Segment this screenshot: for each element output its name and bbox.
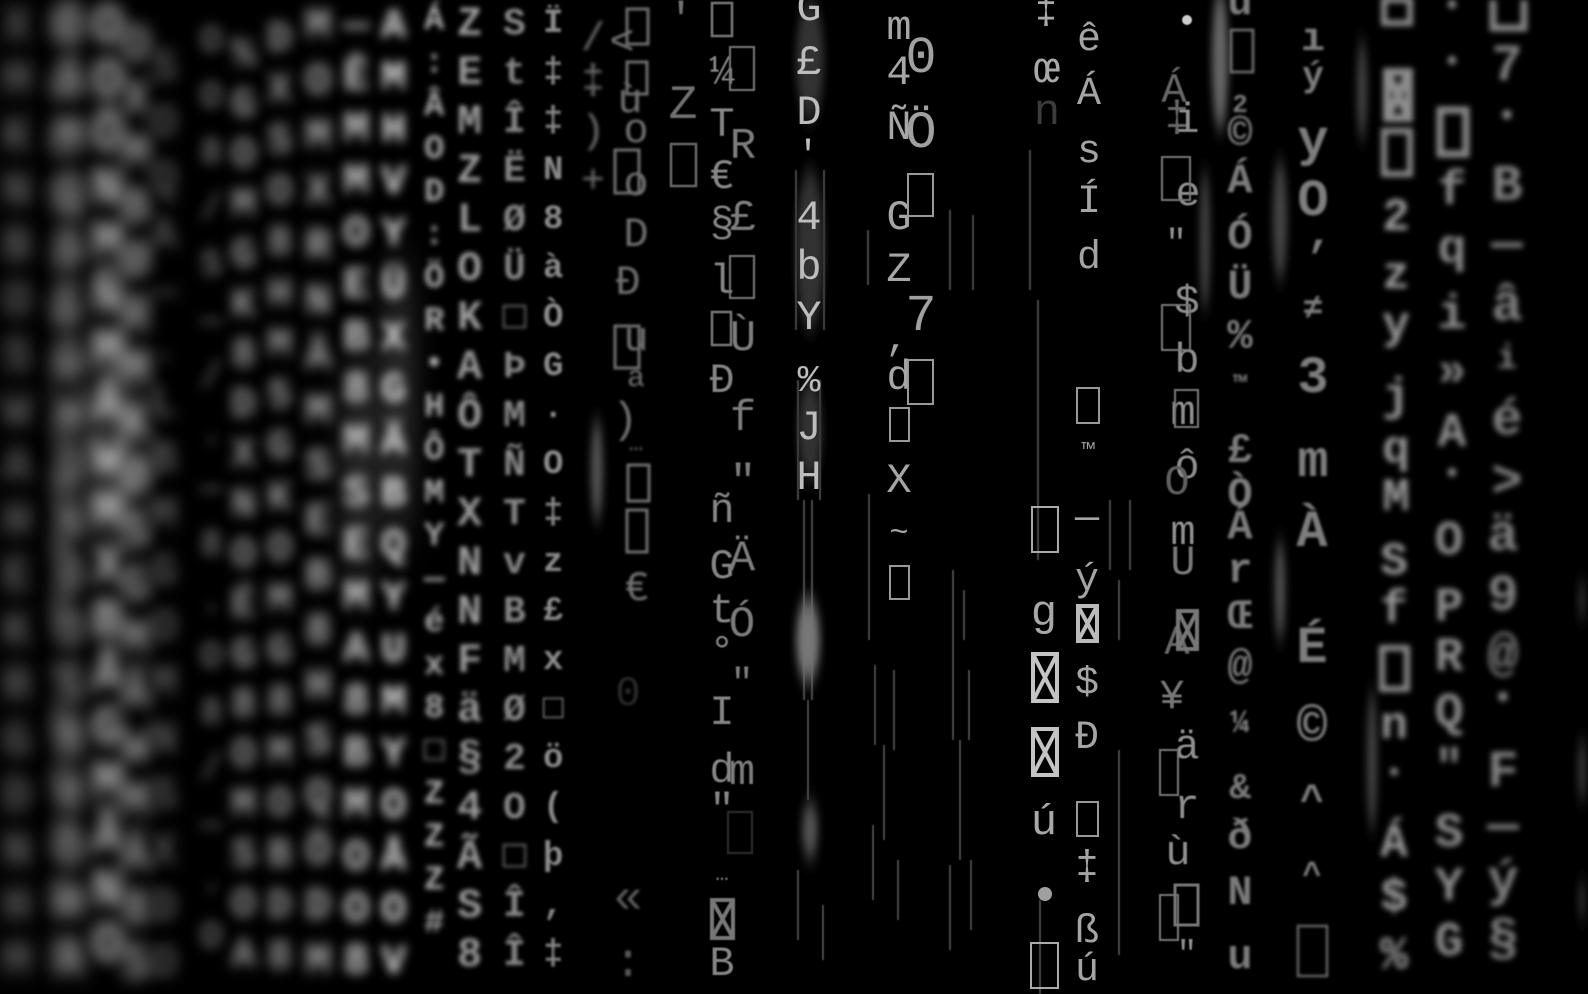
column: characters at 1313: ı (1301, 18, 1325, 63)
column: characters at 1505: ä (1487, 507, 1519, 566)
column: characters at 1240: Œ (1227, 593, 1253, 641)
column: characters at 1240: r (1227, 547, 1253, 595)
column: layered characters at 1183: ¥ (1159, 673, 1185, 721)
column: boxes and glyphs at 635: o (623, 107, 649, 155)
column: layered characters at 1183: m (1170, 509, 1196, 557)
column: characters at 1313: m (1297, 433, 1329, 492)
column: mixed glyphs at 742: m (729, 748, 755, 798)
column 14: ZEMZLOKAÔTXNNFä§4ÃS8 (457, 0, 482, 979)
column: characters at 1313: É (1296, 619, 1328, 678)
column: layered characters at 1183: r (1174, 783, 1200, 831)
column: mixed glyphs at 742: Ó (729, 598, 755, 650)
column: characters at 1313: ^ (1300, 780, 1324, 825)
column: characters at 1313: À (1296, 503, 1328, 562)
column: layered characters at 1183: i (1174, 97, 1200, 145)
column: characters at 1450 (1435, 0, 1467, 970)
column: characters at 1240: ð (1227, 813, 1253, 861)
column: bright characters at 809: ' (797, 135, 819, 178)
column: characters at 1240: N (1227, 869, 1253, 917)
column: layered characters at 1183: ù (1165, 829, 1191, 877)
column: characters at 1450: P (1435, 581, 1463, 635)
column: mixed glyphs at 722: ° (709, 629, 735, 677)
column: characters at 1505: — (1490, 215, 1523, 274)
column: mixed glyphs at 722: B (709, 940, 735, 988)
column: mixed glyphs at 722: t (709, 587, 735, 635)
column: layered characters at 1183: U (1170, 539, 1196, 587)
column: characters at 1505: i (1497, 341, 1517, 379)
column: characters at 1450: R (1435, 631, 1464, 685)
column: mixed glyphs at 722: € (709, 153, 735, 201)
column: characters at 920: Ö (905, 104, 937, 163)
column: characters at 899 (886, 4, 912, 599)
column: bright characters at 809: % (798, 360, 821, 403)
column: characters at 1088: Đ (1075, 716, 1099, 761)
column: far left sharp group: ) (581, 110, 605, 155)
column: characters at 1396: M (1382, 472, 1410, 524)
column: characters at 1505: — (1486, 797, 1519, 856)
column: mixed glyphs at 722: Đ (709, 357, 735, 405)
column: characters at 899: , (886, 319, 908, 362)
column: characters at 1505: F (1487, 743, 1519, 802)
column: characters at 899: m (886, 4, 912, 52)
column: characters at 1240: 2 (1232, 90, 1248, 120)
column: layered characters at 1183: Á (1161, 66, 1187, 115)
column: bright characters at 809 (796, 0, 822, 502)
column: characters at 1313 (1296, 18, 1333, 976)
blurred background code columns (0, 0, 566, 994)
column: characters at 1240: Ó (1227, 212, 1253, 261)
column: characters at 1396: $ (1380, 872, 1408, 924)
column 6: SOQA—.LBMGOMNSXDO (150, 42, 178, 990)
column: characters at 1396: . (1380, 737, 1408, 789)
column: characters at 920: 7 (905, 287, 937, 346)
column 15: StÎËØÜ□ÞMÑTvBMØ2O□ÎÎ (503, 3, 526, 977)
column: characters at 1450: G (1435, 916, 1463, 970)
column: characters at 1450: A (1438, 407, 1467, 461)
column: boxes and glyphs at 635: < (609, 19, 635, 67)
column: characters at 1396: f (1380, 584, 1408, 636)
column: layered characters at 1183: m (1170, 389, 1196, 437)
column: bright characters at 809: J (796, 404, 822, 452)
column 16: Ï‡‡N8àÒG·O‡z£x□ö(þ,‡ (543, 5, 563, 974)
column: characters at 1313: , (1307, 210, 1333, 260)
column: characters at 1450: q (1438, 223, 1466, 277)
column: characters at 1313: © (1296, 699, 1328, 758)
column: far left sharp group (581, 18, 605, 205)
column: characters at 1450: • (1443, 458, 1461, 492)
column: characters at 1450: • (1443, 46, 1461, 80)
column: Z group: Z (669, 79, 697, 133)
column: characters at 1240: ™ (1233, 373, 1248, 400)
column 2: BOOD8WM0RKE—NOSDM (50, 0, 80, 985)
column: layered characters at 1183: ‡ (1164, 95, 1190, 143)
column: boxes at 1044: g (1031, 589, 1057, 639)
column: characters at 1396: 2 (1382, 192, 1410, 244)
column: bright characters at 809: Y (796, 294, 822, 342)
column: characters at 1088: ê (1077, 18, 1101, 63)
column: boxes and glyphs at 635: € (624, 565, 650, 613)
column: mixed glyphs at 742: " (730, 458, 756, 508)
column: layered characters at 1183: ô (1174, 443, 1200, 491)
column: characters at 1505: é (1491, 391, 1523, 450)
column: characters at 899: d (886, 354, 912, 402)
column: characters at 899: Z (886, 246, 912, 294)
column: mixed glyphs at 742: Ù (730, 312, 756, 364)
column: characters at 1396: y (1382, 300, 1410, 352)
column: edge of frame (1578, 580, 1586, 920)
column: layered characters at 1183: O (1164, 459, 1190, 507)
column: boxes at 1044: œ (1034, 46, 1060, 96)
column: characters at 1088: $ (1075, 662, 1099, 707)
column: mixed glyphs at 722: l (709, 258, 735, 306)
column: mixed glyphs at 722: T (709, 101, 735, 149)
column: characters at 1450: " (1435, 743, 1463, 797)
column: boxes and glyphs at 635 (609, 9, 650, 991)
column: characters at 1088: d (1077, 236, 1101, 281)
column: mixed glyphs at 742: £ (730, 194, 756, 244)
column: far left sharp group: / (581, 18, 605, 63)
column: characters at 1450: f (1438, 165, 1466, 219)
column: characters at 1396: j (1382, 372, 1410, 424)
column: layered characters at 1183: " (1165, 224, 1187, 265)
column: characters at 1088: Í (1077, 178, 1101, 225)
column: mixed glyphs at 722: ñ (709, 487, 735, 535)
column: far left sharp group: ‡ (581, 60, 605, 105)
column: characters at 1088: ú (1075, 948, 1099, 993)
column: boxes and glyphs at 635: « (614, 873, 642, 927)
column 12: AMHVYÜXGÄBQYUMYOÅOV (381, 2, 406, 986)
column: characters at 1313: ý (1302, 56, 1324, 97)
column: mixed glyphs at 722: d (709, 747, 735, 795)
column: bright characters at 809: b (796, 244, 822, 292)
column: boxes and glyphs at 635: 0 (615, 670, 641, 718)
column: characters at 1240: @ (1227, 643, 1253, 691)
column: characters at 1505: B (1491, 157, 1523, 216)
column: characters at 1240: Ò (1227, 470, 1253, 519)
column: mixed glyphs at 722: § (709, 201, 735, 249)
column: characters at 1240: % (1227, 313, 1253, 361)
column: far left sharp group: + (581, 160, 605, 205)
column: characters at 1396: Á (1380, 817, 1408, 870)
column: layered characters at 1183: " (1177, 937, 1197, 975)
column: mixed glyphs at 722: I (709, 689, 735, 737)
column: bright characters at 809: 4 (796, 194, 822, 242)
column: characters at 1505: > (1491, 453, 1523, 512)
column: boxes at 1044: n (1034, 88, 1060, 138)
column: characters at 1450: i (1438, 289, 1466, 343)
column: boxes and glyphs at 635: Đ (615, 259, 641, 307)
column: characters at 1240: u (1227, 933, 1253, 981)
column: boxes and glyphs at 635: … (629, 431, 643, 458)
column 4: OOÖNMÑMÁWMXBÅGMÃNO (91, 0, 125, 977)
column: characters at 1505: § (1487, 912, 1519, 971)
column: characters at 1450: O (1435, 515, 1463, 569)
column: characters at 920: 0 (905, 29, 937, 88)
column: layered characters at 1183: A (1164, 619, 1190, 667)
column: characters at 1450: » (1438, 346, 1466, 400)
column: boxes and glyphs at 635: u (623, 315, 649, 363)
column: bright characters at 809: D (796, 89, 822, 137)
column: characters at 1240: ¼ (1230, 705, 1250, 742)
column 11: —ÊMMOEB8MSEMA8BMOO8 (343, 1, 369, 987)
column: characters at 1450: Q (1435, 687, 1463, 741)
column: layered characters at 1183: e (1175, 170, 1201, 218)
column: boxes and glyphs at 635: ù (617, 77, 643, 125)
column: characters at 1240: £ (1227, 427, 1253, 475)
column: characters at 1313: y (1297, 112, 1329, 171)
column: bright characters at 809: H (796, 454, 822, 502)
column: mixed glyphs at 722: G (709, 543, 735, 591)
column: characters at 1313: ^ (1302, 857, 1322, 894)
column: characters at 1088: Á (1077, 70, 1101, 117)
column: characters at 1240: © (1227, 111, 1253, 159)
column: characters at 1505: 7 (1491, 37, 1523, 96)
column: characters at 1088: ‡ (1075, 846, 1099, 891)
column: characters at 1505: • (1497, 99, 1517, 137)
column: characters at 1505 (1486, 0, 1524, 971)
column: characters at 1240: Á (1227, 156, 1253, 205)
column: characters at 899: X (886, 457, 912, 505)
column: boxes and glyphs at 635: D (623, 211, 649, 259)
column 10: MOMXRNÄMSEB8HSQÖDM (305, 2, 331, 987)
column: mixed glyphs at 742: R (730, 122, 756, 172)
column: mixed glyphs at 722: … (715, 862, 729, 887)
column: characters at 1088: ™ (1081, 440, 1095, 465)
column: boxes at 1044 (1031, 0, 1060, 988)
column: characters at 1088 (1074, 18, 1101, 993)
column: mixed glyphs at 742: f (730, 394, 756, 444)
glow blobs behind columns (591, 0, 1377, 858)
column: boxes and glyphs at 635: : (614, 937, 642, 991)
column: mixed glyphs at 742: Ä (729, 534, 756, 584)
column: layered characters at 1183: b (1174, 337, 1200, 385)
column: characters at 1240: Á (1227, 502, 1253, 551)
column: characters at 899: G (886, 194, 912, 242)
column: characters at 1240 (1227, 0, 1253, 981)
column: characters at 1396: % (1380, 930, 1408, 982)
column: boxes and glyphs at 635: a (627, 362, 645, 396)
column: characters at 1313: 3 (1297, 349, 1329, 408)
column: characters at 1505: 9 (1487, 567, 1519, 626)
column: layered characters at 1183: ä (1174, 723, 1200, 771)
column: characters at 1088: ý (1075, 558, 1099, 603)
column 5: OXMBØRMKØSGMÃWMÄ8S (120, 17, 151, 994)
column: characters at 1396: q (1382, 424, 1410, 476)
column: characters at 1505: • (1493, 681, 1513, 719)
column: characters at 1240: & (1229, 768, 1251, 809)
column 13: Á:ÂOD:ÖR•HÔMY—éx8□ZZZ# (424, 2, 444, 943)
vertical light streaks (796, 150, 1130, 994)
column: bright characters at 809: £ (796, 39, 822, 87)
column: boxes and glyphs at 635: o (623, 160, 649, 208)
column: characters at 1240: Ü (1227, 263, 1253, 311)
column 1: XMKNBOSWAHEKRGDNHM (2, 0, 32, 991)
column: characters at 1088: s (1077, 130, 1101, 175)
column: characters at 1505: â (1491, 277, 1523, 336)
column: layered characters at 1183: $ (1174, 279, 1200, 327)
column: characters at 1450: S (1435, 807, 1463, 861)
column: characters at 1396: z (1382, 250, 1410, 302)
column: characters at 899: 4 (886, 49, 912, 97)
column: Z group (668, 0, 697, 186)
column: mixed glyphs at 722 (709, 3, 735, 988)
column: layered characters at 1183 (1159, 15, 1201, 975)
column 3: ÖÃMQSEGWDN0OSB8ÖMA (54, 0, 85, 992)
column: characters at 1450: Y (1435, 861, 1464, 915)
brightness patches over blurred columns (85, 250, 410, 600)
column: characters at 1396: n (1380, 700, 1408, 752)
column: characters at 920 (905, 29, 937, 404)
column: mixed glyphs at 742 (728, 47, 756, 853)
column 8: %GOMGK8DXNOÉG8OMSOA (231, 31, 256, 979)
column: characters at 1396 (1380, 0, 1410, 982)
column: boxes at 1044: ú (1031, 798, 1057, 848)
column: characters at 1088: — (1074, 497, 1100, 542)
column: characters at 1396: S (1380, 536, 1408, 588)
column: characters at 1088: ß (1075, 910, 1099, 955)
column: mixed glyphs at 722: ¼ (709, 49, 735, 97)
column: mixed glyphs at 742: " (731, 663, 753, 706)
column: boxes and glyphs at 635: ) (612, 396, 638, 446)
column: characters at 1505: ý (1487, 852, 1519, 911)
column: characters at 1505: @ (1487, 627, 1519, 686)
column: characters at 1313: ≠ (1303, 291, 1323, 329)
column: characters at 899: ~ (889, 515, 909, 552)
column: characters at 899: Ñ (886, 103, 912, 152)
column 7: OO8/S—/.—8.O8/—.O (200, 20, 223, 959)
column 9: DXSO8HM5GKOMG8MOBD8 (267, 15, 292, 981)
column: mixed glyphs at 722: " (709, 787, 735, 835)
column: characters at 1313: O (1297, 172, 1329, 231)
